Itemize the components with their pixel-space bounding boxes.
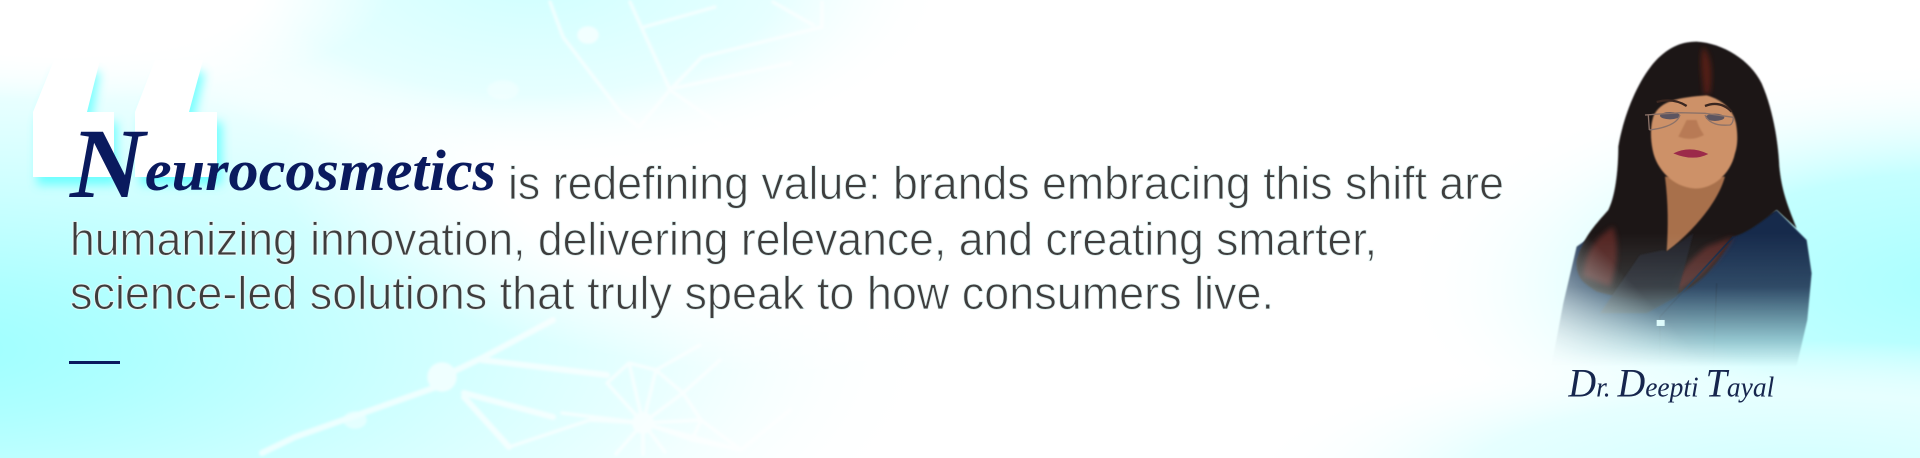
neck (1665, 177, 1725, 252)
accent bar (69, 361, 120, 364)
blouse (1600, 233, 1693, 313)
nose (1678, 120, 1704, 139)
eyes and glasses (1645, 100, 1733, 130)
neural network pattern: top (489, 2, 822, 127)
decorative quotation marks (33, 60, 222, 185)
quote text (69, 108, 1504, 319)
quote line 3: science-led solutions that truly speak to how consumers live. (70, 267, 1274, 319)
jacket (1550, 210, 1812, 373)
neural network pattern: bottom (262, 320, 790, 454)
portrait: Dr. Deepti Tayal (1550, 42, 1812, 406)
face (1651, 95, 1737, 188)
jacket lapel (1672, 236, 1734, 303)
button (1657, 320, 1665, 326)
hair (1576, 42, 1797, 300)
quote line 2: humanizing innovation, delivering relevance, and creating smarter, (70, 213, 1377, 265)
script highlight: Neurocosmetics: eurocosmetics (145, 138, 496, 203)
signature: Dr. Deepti Tayal (1567, 361, 1774, 406)
hair highlight (1583, 227, 1733, 292)
script highlight: Neurocosmetics: N (69, 108, 149, 219)
quote line 1: is redefining value: brands embracing this shift are (508, 157, 1504, 209)
lips (1673, 149, 1708, 158)
